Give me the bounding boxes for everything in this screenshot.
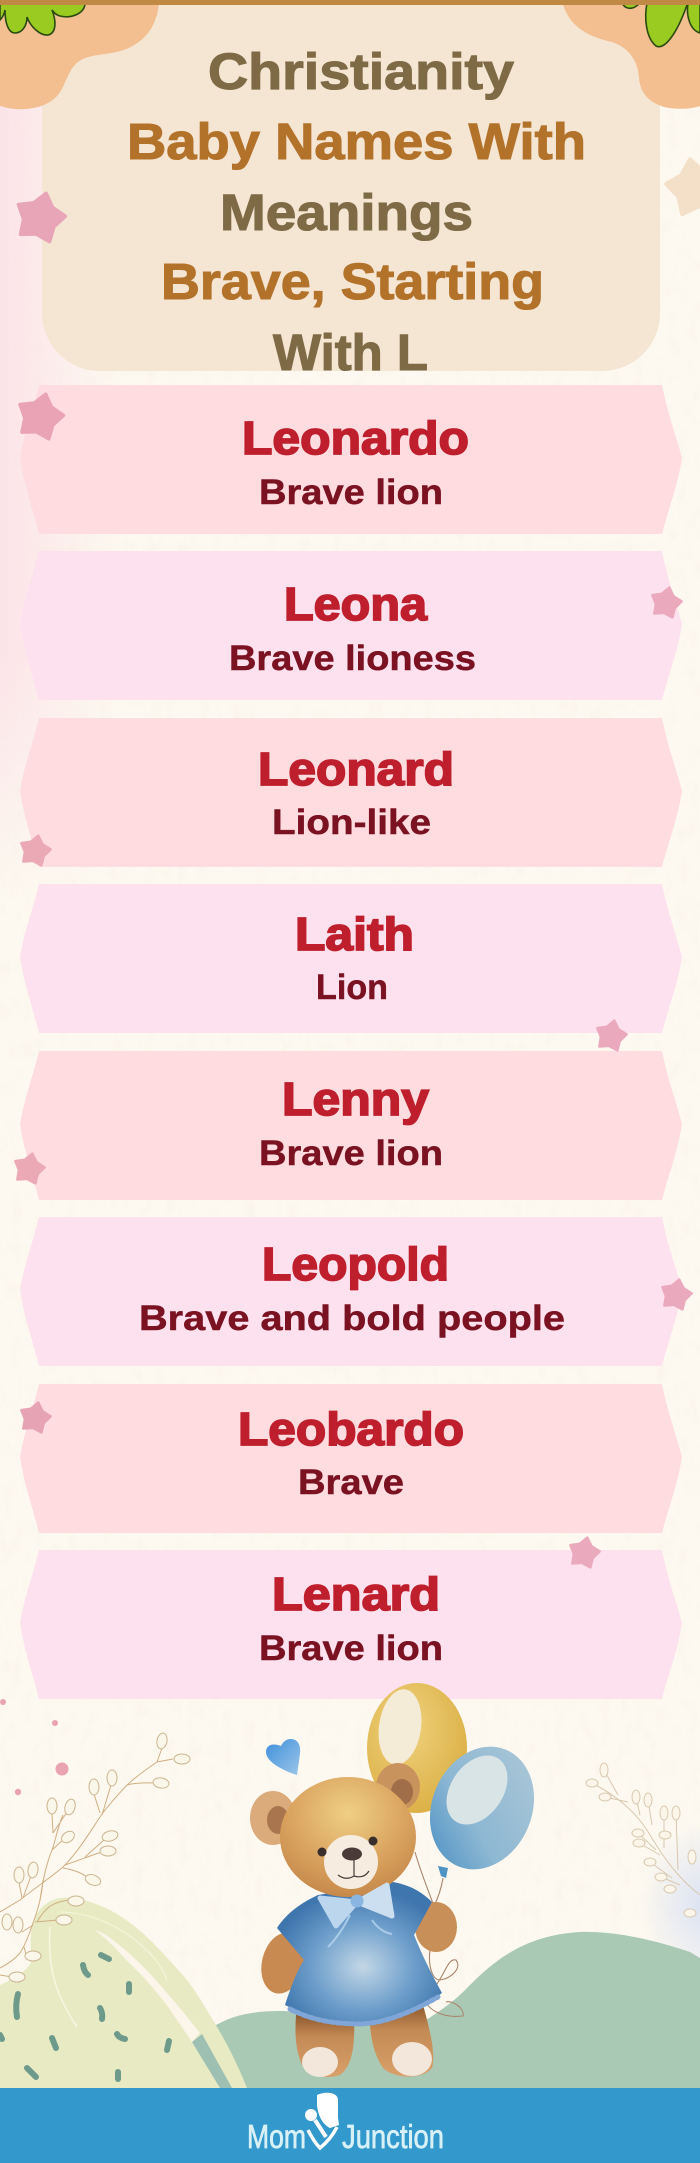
- dress hem: [290, 1997, 438, 2024]
- heading: title text: [127, 43, 586, 381]
- icon: green leaf left: [0, 3, 85, 35]
- hill: pale yellow with dashes: [0, 1898, 247, 2088]
- meaning: Lion-like: Lion-like: [272, 803, 431, 842]
- star: Leopold: [659, 1276, 694, 1311]
- panel: Leona: [20, 551, 682, 700]
- panel: Leopold: [20, 1217, 682, 1366]
- top bar: [0, 0, 700, 5]
- meaning: Brave lioness: Brave lioness: [229, 639, 476, 678]
- panel: Lenard: [20, 1550, 682, 1699]
- bear head: [280, 1777, 416, 1897]
- branch: right: [586, 1763, 700, 1917]
- hill: green: [200, 1932, 700, 2088]
- balloon: blue: [412, 1731, 552, 1885]
- logo: MomJunction: Mom: [247, 2118, 306, 2155]
- star: Leona: [649, 584, 684, 619]
- meaning: Brave lion: Brave lion: [259, 1629, 443, 1668]
- icon: green leaf right: [622, 3, 700, 47]
- panel: Lenny: [20, 1051, 682, 1200]
- meaning: Lion: Lion: [316, 968, 388, 1007]
- branch: left: [0, 1732, 190, 1982]
- panel: Leonard: [20, 718, 682, 867]
- name: Leobardo: Leobardo: [238, 1403, 464, 1455]
- peach corner: right: [562, 0, 700, 109]
- name: Leopold: Leopold: [262, 1238, 449, 1290]
- bear face: [318, 1835, 378, 1889]
- meaning: Brave lion: Brave lion: [259, 1134, 443, 1173]
- decorative pink dots: [0, 1699, 68, 1795]
- bear dress: [277, 1882, 442, 2023]
- bear ears: [250, 1763, 420, 1845]
- bear legs: [295, 2005, 433, 2077]
- heading: title text: With L: [273, 324, 428, 381]
- peach corner: left: [0, 0, 159, 109]
- panel: Laith: [20, 884, 682, 1033]
- meaning: Brave: Brave: [298, 1463, 404, 1502]
- name: Leonard: Leonard: [258, 743, 454, 795]
- star: Lenny: [12, 1150, 47, 1185]
- meaning: Brave and bold people: Brave and bold people: [139, 1299, 565, 1338]
- name: Lenard: Lenard: [272, 1568, 440, 1620]
- star: Laith: [594, 1017, 629, 1052]
- name: Laith: Laith: [295, 908, 414, 960]
- bear bow: [320, 1885, 392, 1947]
- panel: Leobardo: [20, 1384, 682, 1533]
- name: Leona: Leona: [284, 578, 427, 630]
- meaning: Brave lion: Brave lion: [259, 473, 443, 512]
- name: Leonardo: Leonardo: [242, 412, 469, 464]
- star: title right: [663, 155, 700, 216]
- heading: title text: Brave, Starting: [161, 253, 544, 310]
- panel: title: [42, 0, 660, 381]
- name: Lenny: Lenny: [282, 1073, 429, 1125]
- balloon: yellow: [367, 1683, 467, 1813]
- logo: MomJunction: Junction: [342, 2118, 444, 2155]
- star: Leonard: [18, 832, 53, 867]
- panel: Leonardo: [20, 385, 682, 534]
- heading: title text: Christianity: [208, 43, 515, 100]
- star: Leobardo: [18, 1399, 53, 1434]
- star: Leonardo: [14, 389, 67, 441]
- footer bar: [0, 2088, 700, 2163]
- icon: blue heart: [266, 1739, 300, 1775]
- heading: title text: Meanings: [220, 184, 473, 241]
- star: title left: [12, 188, 69, 244]
- illustration: teddy bear: [250, 1763, 457, 2077]
- heading: title text: Baby Names With: [127, 113, 586, 170]
- star: Lenard: [567, 1534, 602, 1569]
- logo: MomJunction: [247, 2093, 444, 2155]
- balloon strings: [415, 1852, 463, 2016]
- bear arms: [255, 1902, 457, 1998]
- icon: mother and child: [305, 2093, 339, 2148]
